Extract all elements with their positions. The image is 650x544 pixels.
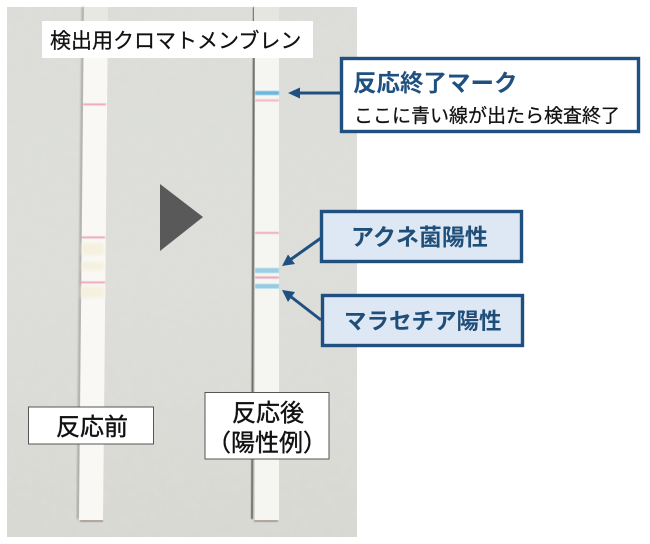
label: after reaction, positive example: （陽性例） — [207, 430, 327, 457]
strip bands — [255, 91, 279, 288]
callout: Malassezia positive — [322, 296, 522, 346]
callout: Cutibacterium positive — [322, 212, 522, 262]
callout: Malassezia positive: マラセチア陽性 — [344, 309, 502, 334]
strip after reaction — [251, 7, 279, 522]
strip lines — [80, 104, 106, 283]
label: before reaction — [28, 407, 154, 444]
arrow: to end mark — [288, 88, 341, 98]
arrow: progress triangle — [160, 184, 203, 251]
callout: reaction end mark: ここに青い線が出たら検査終了 — [354, 105, 620, 127]
photo background — [7, 7, 357, 537]
callout: Cutibacterium positive: アクネ菌陽性 — [351, 224, 488, 250]
label: before reaction: 反応前 — [56, 414, 128, 441]
label: detection membrane: 検出用クロマトメンブレン — [50, 30, 301, 53]
arrow: to Cutibacterium band — [282, 238, 321, 266]
strip before reaction — [77, 7, 108, 522]
label: after reaction, positive example: 反応後 — [232, 400, 304, 427]
callout: reaction end mark: 反応終了マーク — [353, 70, 518, 96]
arrow: to Malassezia band — [282, 290, 321, 320]
callout: reaction end mark — [342, 58, 638, 132]
label: after reaction, positive example — [205, 392, 329, 459]
label: detection membrane — [42, 21, 313, 58]
buffer tint — [81, 243, 104, 298]
